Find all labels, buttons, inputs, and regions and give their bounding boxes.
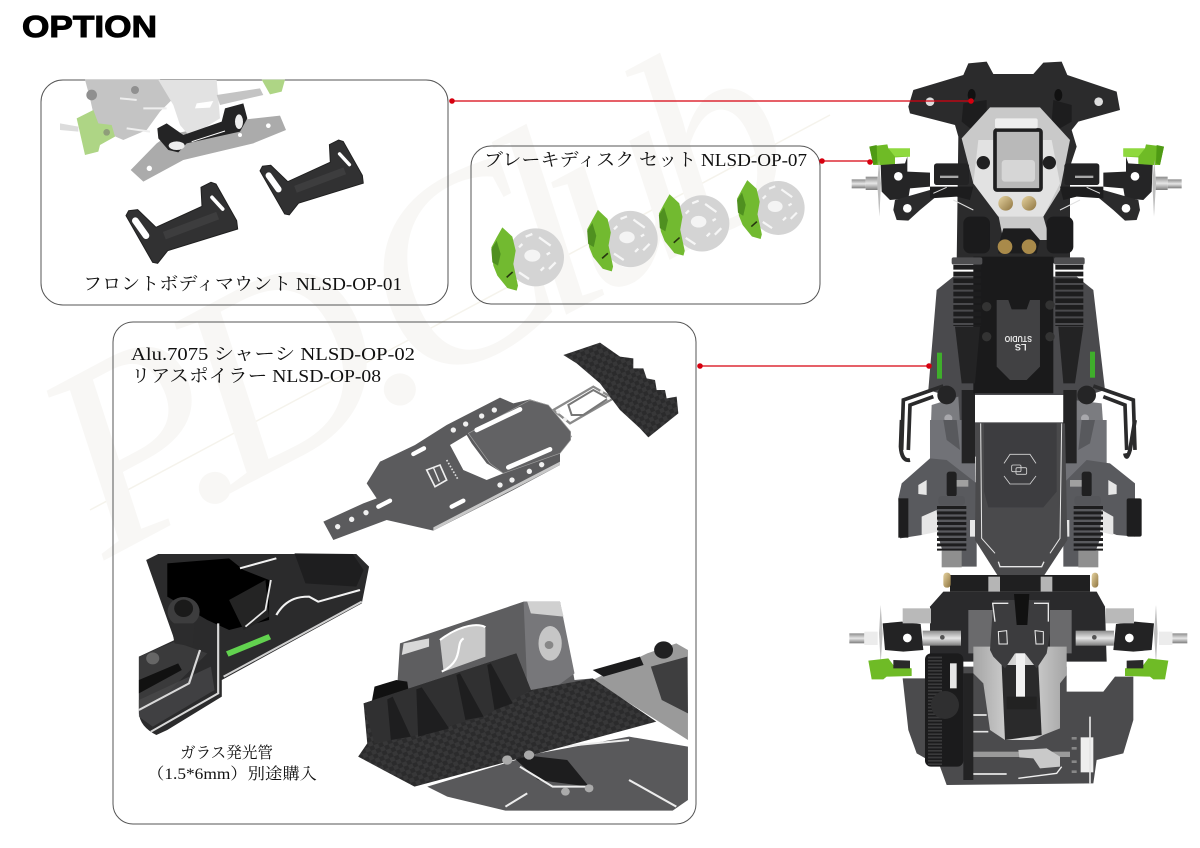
caption: ブレーキディスク セット NLSD-OP-07 [484,150,807,170]
panel: brake disc set [471,146,820,304]
leader line: front body mount [449,98,974,104]
panel: aluminium chassis and rear spoiler [113,322,696,824]
LS STUDIO logo [1005,334,1032,352]
caption [131,344,415,386]
LS STUDIO logo: LS [1015,342,1027,352]
LS STUDIO logo: STUDIO [1005,334,1032,343]
caption: glass tube: （1.5*6mm）別途購入 [147,765,317,783]
rear half [849,420,1187,785]
illustration: glass tube close-up [139,553,369,735]
illustration: complete chassis top view [849,62,1187,785]
caption: Alu.7075 シャーシ NLSD-OP-02 [131,344,415,364]
panel: front body mount [41,80,448,305]
leader line: chassis [697,363,932,369]
caption: リアスポイラー NLSD-OP-08 [131,366,381,386]
caption: フロントボディマウント NLSD-OP-01 [83,274,402,294]
logo hexagon [1004,454,1036,484]
front half [852,62,1182,457]
caption: glass tube: ガラス発光管 [180,744,273,762]
leader line: brake disc [819,158,873,165]
caption: glass tube [147,744,317,783]
illustration: rear spoiler close-up [358,602,688,811]
illustration: faded front assembly and two body mounts [60,80,363,263]
illustration: four brake discs [491,180,805,291]
title: OPTION [22,9,157,44]
illustration: chassis plate with spoiler [323,343,678,540]
